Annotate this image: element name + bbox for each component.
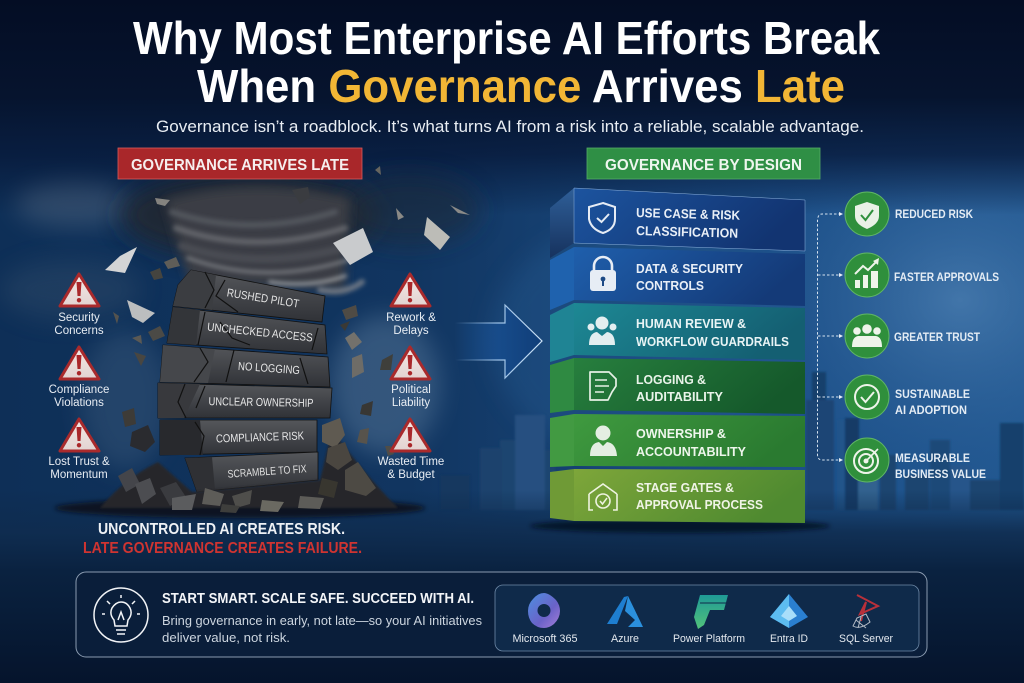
layer: data and security controls — [550, 247, 805, 310]
warning: political liability: Liability — [392, 397, 430, 409]
block: compliance risk — [160, 420, 317, 455]
layer: ownership and accountability: ACCOUNTABILITY — [636, 444, 746, 459]
logo: power platform — [673, 595, 745, 645]
layer: stage gates and approval process — [530, 469, 830, 533]
footer message: deliver value, not risk. — [162, 630, 290, 645]
layer: stage gates and approval process: APPROVAL PROCESS — [636, 497, 763, 512]
title — [133, 12, 880, 112]
icon: light bulb — [94, 588, 148, 642]
layer: ownership and accountability — [550, 414, 805, 467]
benefit: sustainable ai adoption: SUSTAINABLE — [895, 387, 970, 401]
block: rushed pilot — [173, 270, 325, 322]
benefit: reduced risk — [845, 192, 973, 236]
footer message — [162, 591, 482, 645]
badge: governance arrives late: GOVERNANCE ARRIVES LATE — [131, 157, 349, 174]
block: compliance risk: COMPLIANCE RISK — [216, 430, 304, 446]
layer: ownership and accountability: OWNERSHIP & — [636, 426, 726, 441]
badge: governance by design — [587, 148, 820, 179]
benefit: sustainable ai adoption: AI ADOPTION — [895, 403, 967, 417]
arrow: from late to by design — [455, 305, 542, 378]
logo: azure: Azure — [611, 633, 639, 645]
warning: compliance violations: Compliance — [49, 384, 109, 396]
warning: political liability: Political — [391, 384, 431, 396]
warning: lost trust and momentum — [48, 419, 110, 481]
panel: microsoft platform logos — [495, 585, 919, 651]
block: scramble to fix — [185, 452, 318, 492]
logo: azure — [607, 596, 643, 645]
warning: security concerns: Concerns — [54, 325, 104, 337]
benefit: sustainable ai adoption — [845, 375, 970, 419]
warning: security concerns: Security — [58, 312, 100, 324]
block: unclear ownership: UNCLEAR OWNERSHIP — [208, 396, 314, 410]
footer message: Bring governance in early, not late—so your AI initiatives — [162, 613, 482, 628]
ground and bottom fade — [0, 490, 1024, 683]
dashed connector lines — [818, 212, 843, 462]
logo: sql server — [839, 595, 893, 645]
benefit: faster approvals — [845, 253, 999, 297]
warning statement: LATE GOVERNANCE CREATES FAILURE. — [83, 540, 362, 557]
background: city skyline — [440, 372, 1024, 510]
warning: wasted time and budget — [378, 419, 444, 481]
warning: security concerns — [54, 274, 104, 337]
warning: wasted time and budget: Wasted Time — [378, 456, 444, 468]
logo: microsoft 365: Microsoft 365 — [512, 633, 578, 645]
panel: governance arrives late — [0, 148, 480, 557]
logo: power platform: Power Platform — [673, 633, 745, 645]
warning: compliance violations — [49, 347, 109, 409]
block: no logging — [160, 345, 330, 387]
benefit: greater trust — [845, 314, 981, 358]
logo: sql server: SQL Server — [839, 633, 893, 645]
logo: entra id — [770, 594, 808, 645]
layer: use case and risk classification: USE CASE & RISK — [636, 205, 741, 223]
block: no logging: NO LOGGING — [238, 361, 300, 377]
title: When Governance Arrives Late — [197, 60, 845, 112]
layer: use case and risk classification: CLASSIFICATION — [636, 223, 738, 241]
title: Why Most Enterprise AI Efforts Break — [133, 12, 880, 64]
layer: data and security controls: DATA & SECURITY — [636, 261, 743, 276]
block: rushed pilot: RUSHED PILOT — [226, 287, 300, 311]
block: unclear ownership — [158, 383, 332, 418]
warning: wasted time and budget: & Budget — [387, 469, 435, 481]
rubble pile — [55, 166, 470, 518]
logo: microsoft 365 — [512, 593, 578, 645]
warning statement — [83, 521, 362, 557]
layer: data and security controls: CONTROLS — [636, 278, 704, 293]
warning: rework and delays: Delays — [393, 325, 429, 337]
badge: governance by design: GOVERNANCE BY DESIGN — [605, 157, 802, 174]
panel: governance by design — [530, 148, 999, 533]
block: scramble to fix: SCRAMBLE TO FIX — [227, 463, 307, 481]
flying paper debris — [105, 217, 450, 323]
tower of cracked stone blocks — [158, 270, 332, 492]
block: unchecked access: UNCHECKED ACCESS — [207, 321, 314, 345]
benefit: reduced risk: REDUCED RISK — [895, 207, 973, 221]
layer: human review and workflow guardrails: WORKFLOW GUARDRAILS — [636, 334, 789, 349]
panel: call to action footer — [76, 572, 927, 657]
layer: human review and workflow guardrails — [550, 303, 805, 362]
footer message: START SMART. SCALE SAFE. SUCCEED WITH AI. — [162, 591, 474, 607]
benefit: greater trust: GREATER TRUST — [894, 330, 981, 344]
layer: logging and auditability: LOGGING & — [636, 372, 706, 387]
layer: use case and risk classification — [550, 188, 805, 258]
badge: governance arrives late — [118, 148, 362, 179]
warning: rework and delays — [386, 274, 436, 337]
layer: stage gates and approval process: STAGE GATES & — [636, 480, 734, 495]
warning statement: UNCONTROLLED AI CREATES RISK. — [98, 521, 345, 538]
warning: lost trust and momentum: Momentum — [50, 469, 108, 481]
warning: rework and delays: Rework & — [386, 312, 436, 324]
benefit: measurable business value: BUSINESS VALUE — [895, 467, 986, 481]
warning: compliance violations: Violations — [54, 397, 104, 409]
benefit: measurable business value — [845, 438, 986, 482]
benefit: faster approvals: FASTER APPROVALS — [894, 270, 999, 284]
block: unchecked access — [167, 307, 327, 354]
layer: human review and workflow guardrails: HUMAN REVIEW & — [636, 316, 746, 331]
tornado storm clouds — [0, 170, 480, 470]
layer: logging and auditability — [550, 358, 805, 414]
layer: logging and auditability: AUDITABILITY — [636, 389, 723, 404]
warning: lost trust and momentum: Lost Trust & — [48, 456, 110, 468]
warning: political liability — [391, 347, 431, 409]
benefit: measurable business value: MEASURABLE — [895, 451, 970, 465]
logo: entra id: Entra ID — [770, 633, 808, 645]
subtitle: Governance isn’t a roadblock. It’s what turns AI from a risk into a reliable, scalable advantage. — [156, 117, 864, 136]
